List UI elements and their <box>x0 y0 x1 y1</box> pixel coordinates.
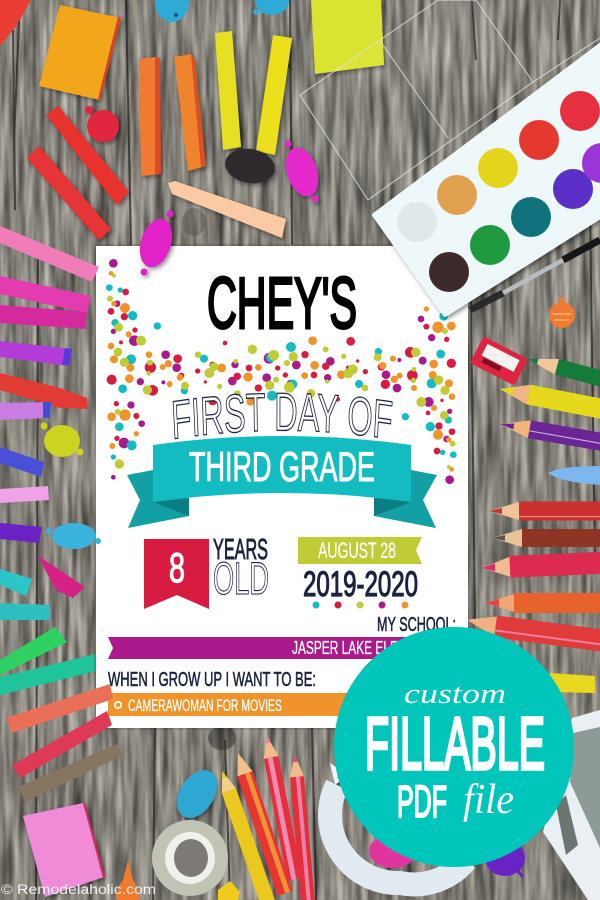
career label: WHEN I GROW UP I WANT TO BE: <box>108 669 316 691</box>
pastels overlapping card <box>0 226 123 802</box>
yellow pastel sticks <box>215 31 292 155</box>
school year: 2019-2020 <box>303 565 418 604</box>
sky blue bead <box>46 523 101 549</box>
top objects <box>0 0 600 239</box>
years old label: OLD <box>213 553 269 604</box>
grade text: THIRD GRADE <box>189 443 375 490</box>
my school label: MY SCHOOL: <box>377 614 456 636</box>
yellow-green bead <box>40 422 84 457</box>
ribbon body <box>153 436 411 502</box>
date ribbon <box>298 537 422 564</box>
white paper <box>96 246 468 728</box>
orange pencil <box>230 750 293 896</box>
protractor <box>330 763 466 884</box>
black textured egg <box>222 145 278 187</box>
first day of outlined arched heading: FIRST DAY OF <box>172 392 393 440</box>
left pastels and orange bead right <box>0 297 575 695</box>
palette tray <box>374 45 600 315</box>
yellow-orange sticky note <box>39 5 121 100</box>
school band: JASPER LAKE ELEMENTARY <box>292 638 455 658</box>
pink bead right <box>280 140 324 202</box>
magenta bead on card <box>134 210 178 276</box>
coloured dots row <box>312 602 408 608</box>
orange striped bead <box>549 297 575 328</box>
years old label: YEARS <box>213 534 268 566</box>
watermark: © Remodelaholic.com <box>1 882 156 897</box>
red bead <box>85 106 119 142</box>
confetti dots <box>106 259 457 484</box>
watercolor palette <box>374 45 600 315</box>
red pencil <box>288 754 315 900</box>
file script: file <box>463 777 514 823</box>
blue textured bead <box>169 763 225 825</box>
pink pencil <box>260 735 302 881</box>
magenta cone <box>37 555 85 598</box>
orange pastel sticks <box>139 54 206 176</box>
peach crayon <box>168 181 286 238</box>
red pencil sharpener <box>470 336 528 386</box>
career band: CAMERAWOMAN FOR MOVIES <box>128 696 282 715</box>
custom script: custom <box>404 679 506 710</box>
right pencils <box>464 336 600 693</box>
teal fillable badge <box>334 627 574 867</box>
pdf word: PDF <box>397 776 447 827</box>
pink note <box>23 803 105 897</box>
clear palette lid <box>300 0 600 200</box>
yellow hex pencil end <box>218 881 240 900</box>
ribbon tails <box>127 470 189 528</box>
paint brush <box>470 240 600 310</box>
age flag <box>144 539 209 609</box>
purple bead <box>485 840 525 877</box>
red note corner <box>0 0 31 46</box>
blue beads <box>155 0 289 22</box>
years old label <box>213 534 269 604</box>
magenta bead <box>369 834 417 868</box>
bottom objects <box>23 710 600 900</box>
printable card <box>94 244 470 730</box>
date ribbon: AUGUST 28 <box>318 538 396 563</box>
ribbon folds <box>153 498 189 516</box>
calculator <box>543 710 600 900</box>
age flag: 8 <box>169 544 185 591</box>
tape roll <box>152 820 228 896</box>
paint wells <box>397 91 600 292</box>
orange bead <box>116 860 139 900</box>
first day of outlined arched heading <box>172 392 393 440</box>
name heading: CHEY'S <box>207 264 357 344</box>
teal ribbon banner <box>127 436 437 528</box>
yellow pencil <box>215 769 279 900</box>
red pastel sticks <box>28 107 128 239</box>
lime sticky note <box>311 0 384 74</box>
school band <box>108 637 458 659</box>
